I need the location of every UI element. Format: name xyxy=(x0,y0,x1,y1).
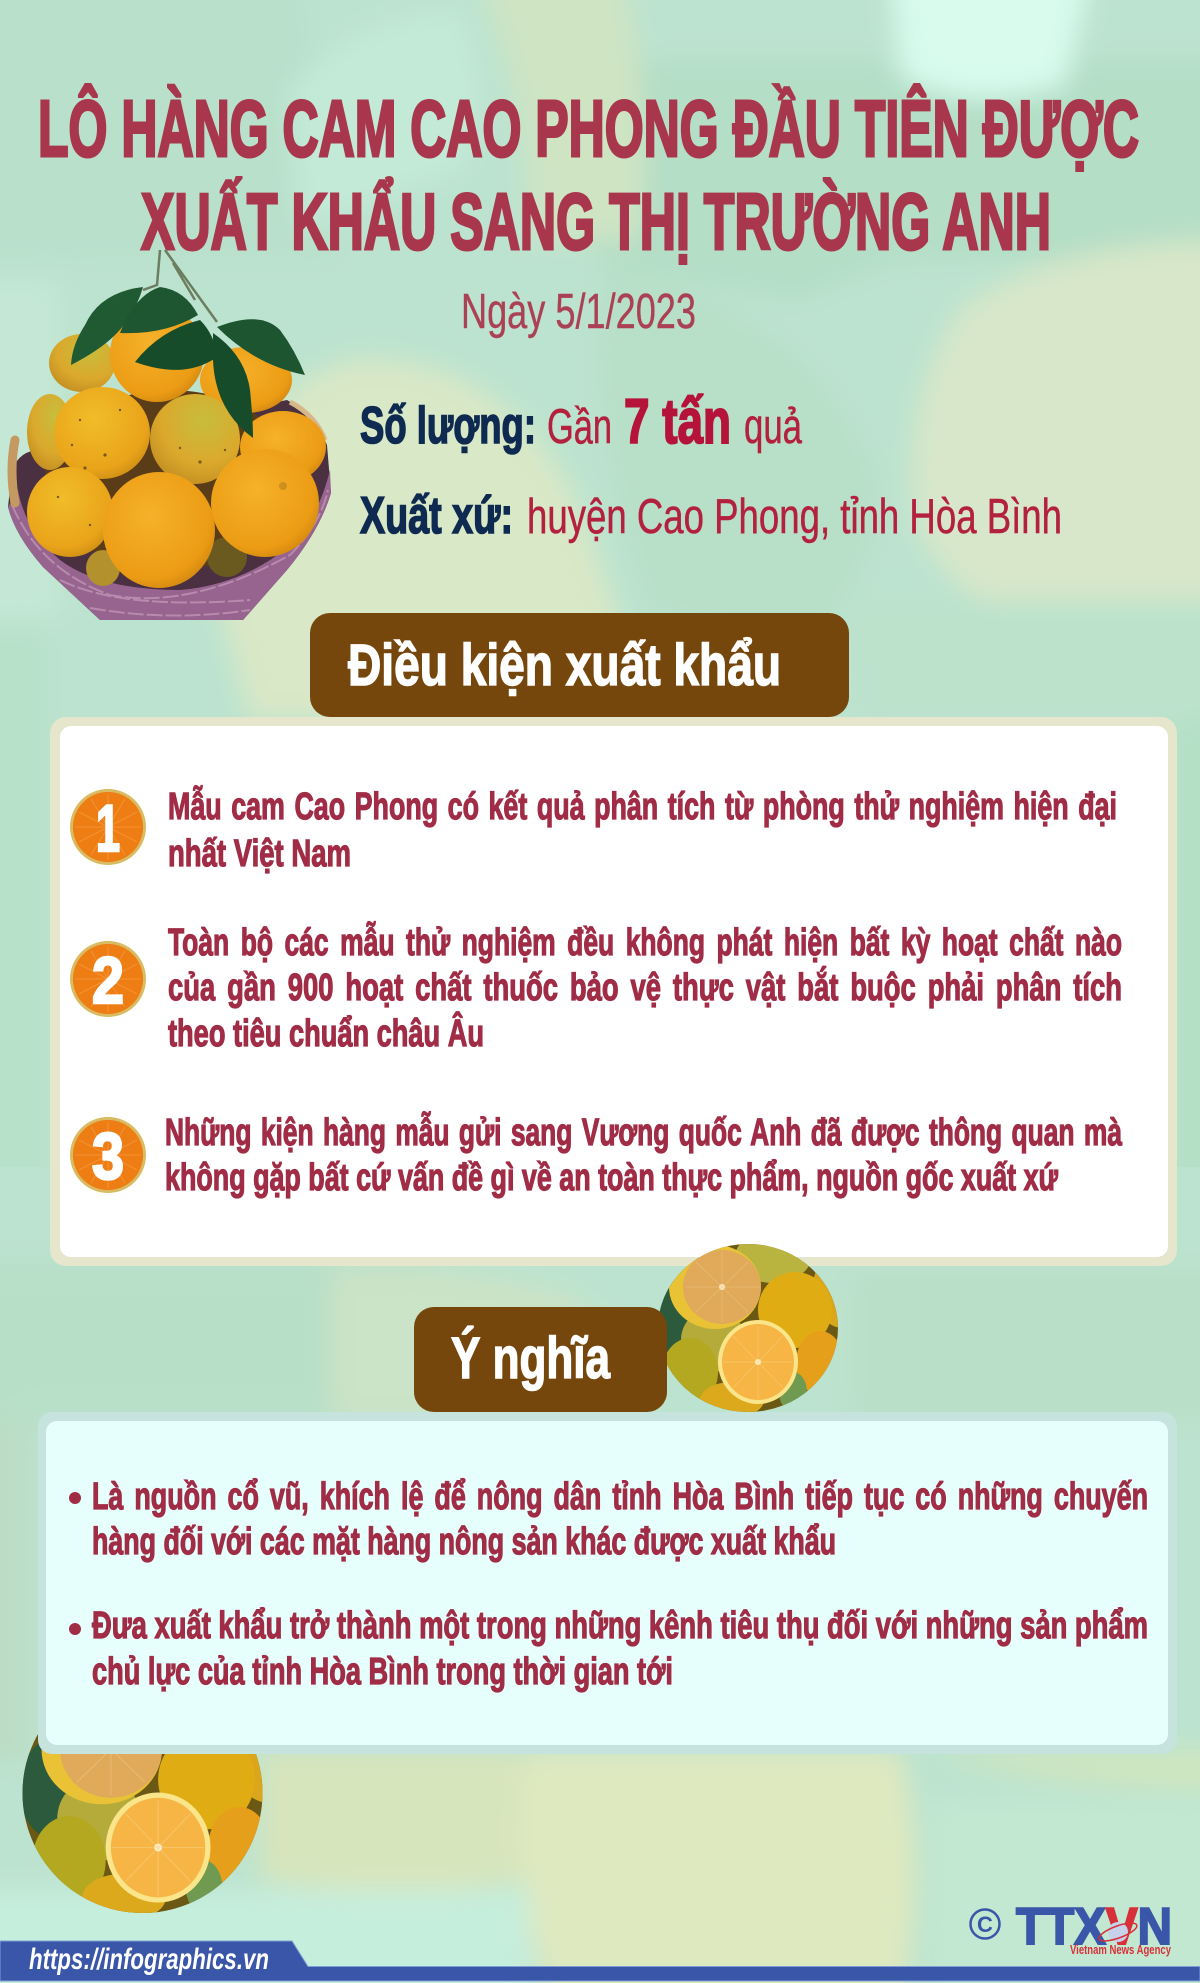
heading: conditions: Điều kiện xuất khẩu xyxy=(348,633,781,698)
item 3: 3 xyxy=(92,1119,124,1193)
item 2: 2 xyxy=(92,943,124,1017)
bullet 1: hàng đối với các mặt hàng nông sản khác được xuất khẩu xyxy=(92,1521,836,1563)
quantity line: quả xyxy=(744,400,803,454)
item 1: nhất Việt Nam xyxy=(168,833,351,875)
bullet 2 xyxy=(69,1605,1148,1693)
image: cut oranges, lower xyxy=(22,1734,262,1913)
image: basket of oranges xyxy=(8,250,331,620)
origin line: Xuất xứ: xyxy=(360,487,513,545)
quantity line: Số lượng: xyxy=(360,397,536,455)
bullet 1 xyxy=(69,1476,1148,1563)
heading: conditions xyxy=(310,613,849,717)
panel: export conditions xyxy=(50,717,1177,1266)
quantity line: Gần xyxy=(547,400,612,454)
item 1: 1 xyxy=(96,791,120,865)
quantity line xyxy=(360,387,803,457)
item 2: theo tiêu chuẩn châu Âu xyxy=(168,1011,484,1055)
image: cut oranges, upper xyxy=(660,1244,838,1412)
origin line xyxy=(360,487,1062,545)
item 1 xyxy=(70,784,1117,875)
heading: significance xyxy=(414,1307,667,1412)
item 2 xyxy=(70,920,1122,1055)
panel: significance xyxy=(38,1412,1177,1754)
title xyxy=(38,84,1139,266)
logo: TTXVN: TTXVN xyxy=(1016,1898,1172,1956)
footer: url ribbon: https://infographics.vn xyxy=(29,1943,269,1976)
heading: significance: Ý nghĩa xyxy=(451,1326,611,1391)
date: Ngày 5/1/2023 xyxy=(461,285,696,339)
footer: url ribbon xyxy=(0,1941,1200,1981)
logo: TTXVN: C xyxy=(977,1912,993,1937)
item 3 xyxy=(70,1110,1123,1199)
bullet 2: chủ lực của tỉnh Hòa Bình trong thời gian tới xyxy=(92,1651,673,1693)
quantity line: 7 tấn xyxy=(624,387,731,457)
